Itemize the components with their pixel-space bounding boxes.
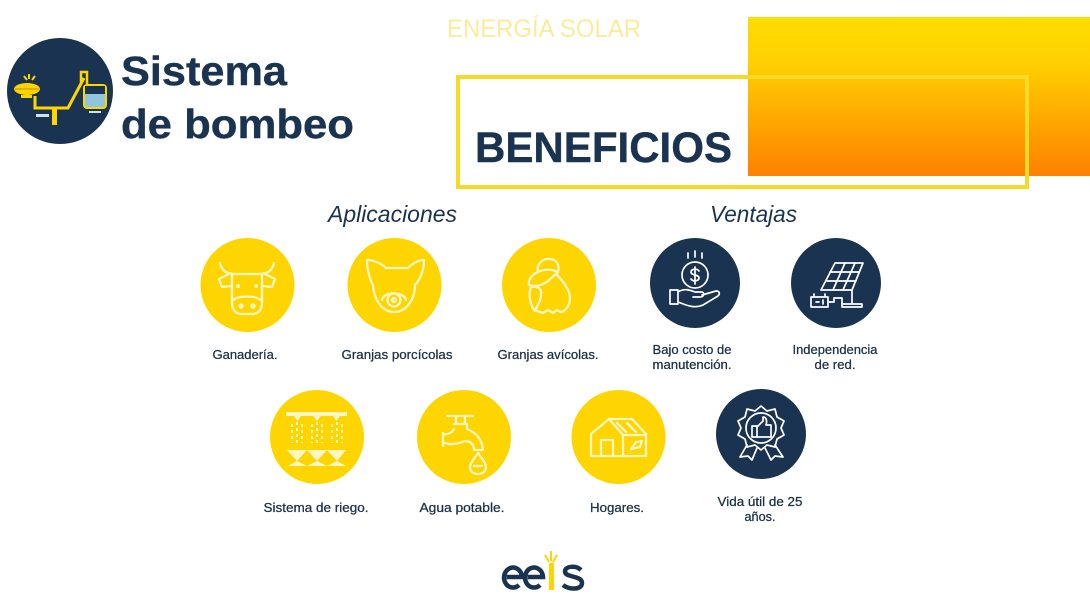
title: Sistema de bombeo: de bombeo	[121, 101, 354, 147]
title: Sistema de bombeo	[121, 48, 354, 147]
heading: Energía solar: ENERGÍA SOLAR	[447, 14, 641, 43]
icon: pig	[348, 238, 442, 332]
heading: Aplicaciones: Aplicaciones	[326, 201, 457, 227]
label: Granjas avícolas: Granjas avícolas.	[498, 348, 598, 362]
logo: eeis	[504, 551, 582, 590]
label: Hogares: Hogares.	[590, 501, 644, 515]
title: Sistema de bombeo: Sistema	[121, 48, 288, 94]
icon: quality badge with thumbs up	[716, 389, 806, 479]
icon: greenhouse home	[572, 390, 666, 484]
icon: cow	[200, 238, 294, 332]
icon: hand with coin	[650, 238, 740, 328]
heading: Ventajas: Ventajas	[710, 201, 797, 227]
label: Bajo costo de manutención: manutención.	[652, 358, 732, 372]
logo icon: solar pumping system	[7, 38, 113, 144]
label: Sistema de riego: Sistema de riego.	[264, 501, 368, 515]
label: Ganadería: Ganadería.	[212, 348, 278, 362]
label: Independencia de red	[792, 343, 878, 372]
label: Bajo costo de manutención: Bajo costo de	[652, 343, 732, 357]
label: Vida útil de 25 años	[718, 495, 803, 524]
label: Agua potable: Agua potable.	[420, 501, 504, 515]
heading: Beneficios: BENEFICIOS	[475, 124, 732, 172]
gradient banner	[748, 17, 1090, 176]
label: Independencia de red: de red.	[814, 358, 856, 372]
label: Independencia de red: Independencia	[792, 343, 878, 357]
label: Bajo costo de manutención	[652, 343, 732, 372]
icon: rooster	[502, 238, 596, 332]
icon: water tap	[417, 390, 511, 484]
icon: irrigation	[270, 390, 364, 484]
label: Granjas porcícolas: Granjas porcícolas	[342, 348, 452, 362]
frame	[458, 77, 1027, 187]
label: Vida útil de 25 años: años.	[744, 510, 776, 524]
label: Vida útil de 25 años: Vida útil de 25	[718, 495, 803, 509]
icon: solar panel and battery	[791, 238, 881, 328]
